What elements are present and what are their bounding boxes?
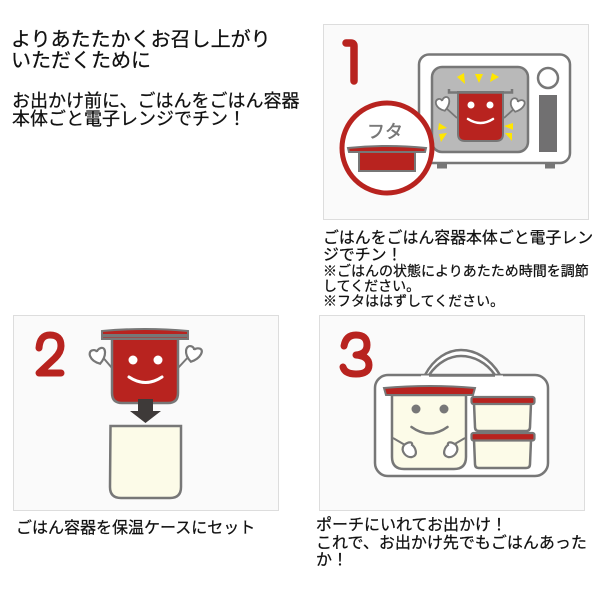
intro text [12,91,300,129]
notes step 1: してください。 [323,278,420,294]
heading [11,28,271,72]
lid close-up circle [342,103,432,193]
number 3 [343,335,371,374]
red character [89,329,203,403]
large container character [384,386,475,469]
caption step 1: ごはんをごはん容器本体ごと電子レン [323,230,593,247]
character in microwave [435,89,525,141]
panel 2: insert into case step [14,316,278,510]
small container bottom [472,433,534,468]
caption step 3: ポーチにいれてお出かけ！ [316,517,507,534]
panel 3: pouch step [320,316,584,510]
lunch pouch [375,350,548,476]
microwave [419,54,570,168]
number 2 [39,335,61,373]
caption step 3 [316,516,587,569]
heading: いただくために [11,50,151,72]
intro text: 本体ごと電子レンジでチン！ [12,109,246,129]
panel 1: microwave step [324,24,588,220]
caption step 1 [323,229,593,264]
insulated case [110,426,181,498]
caption step 1: ジでチン！ [323,247,402,264]
notes step 1: ※ごはんの状態によりあたため時間を調節 [323,263,589,279]
number 1 [346,43,354,81]
yellow sparkles [438,73,513,142]
down arrow [130,399,161,423]
small container top [472,397,534,431]
caption step 3: か！ [316,552,348,569]
caption step 2: ごはん容器を保温ケースにセット [16,520,255,537]
lid close-up circle: フタ [367,122,403,142]
heading: よりあたたかくお召し上がり [11,29,271,51]
caption step 3: これで、お出かけ先でもごはんあった [316,534,587,552]
notes step 1 [323,263,589,309]
intro text: お出かけ前に、ごはんをごはん容器 [12,91,299,111]
notes step 1: ※フタははずしてください。 [323,293,504,309]
